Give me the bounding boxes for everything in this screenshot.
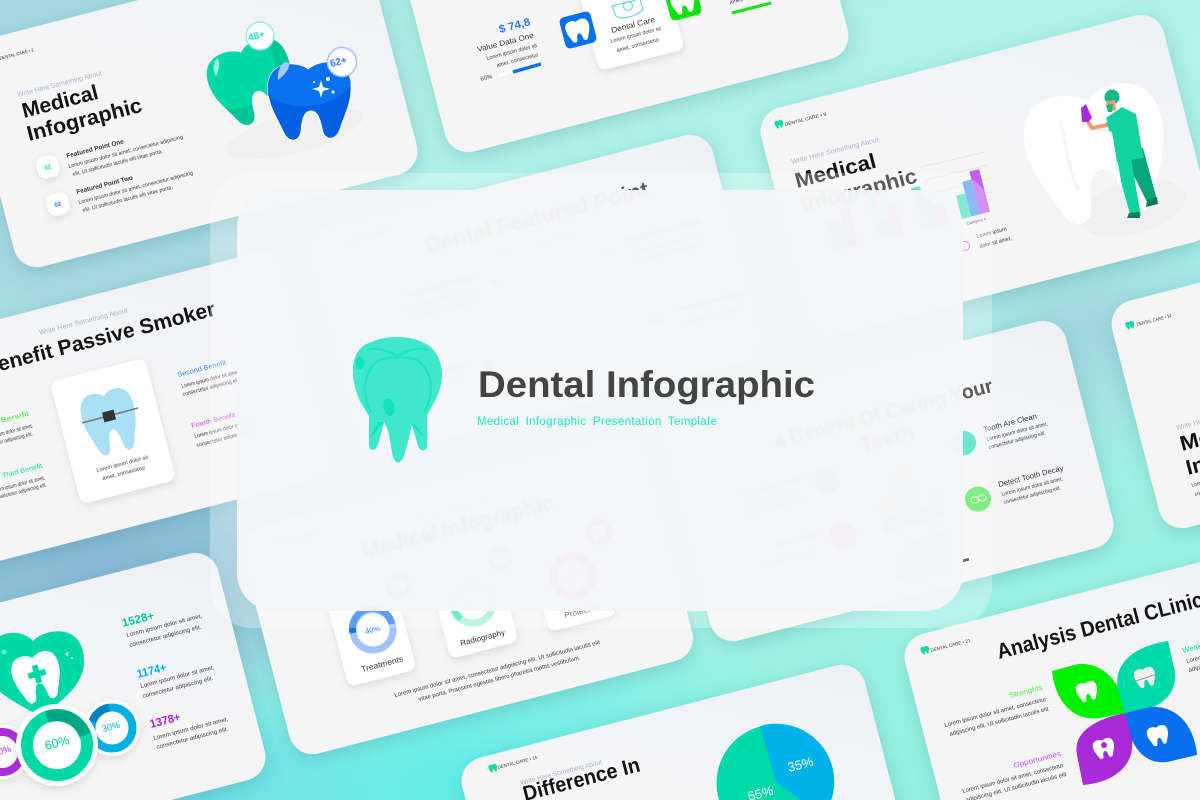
ghost text: featured points: Featured Point Three — [625, 216, 702, 244]
badge: 01: 01 — [44, 164, 53, 172]
paragraph: vitae porta. Praesent egestas libero pharetra mattis vestibulum. — [418, 655, 581, 703]
icon: small tooth and page label: DENTAL CARE • 9 — [784, 111, 827, 127]
ghost text: featured points: 04 — [652, 318, 660, 325]
panel: Medical Infographic teeth slide: DENTAL CARE • 2 — [0, 47, 35, 61]
text block: Tooth Are Clean: consectetur adipiscing elit. — [988, 430, 1047, 451]
text block: Fourth Benefit: Fourth Benefit — [191, 412, 236, 430]
ghost text: featured points: Lorem ipsum dolor sit amet, — [631, 232, 707, 257]
text block: Strenghts: Lorem ipsum dolor sit amet, consectetur — [944, 697, 1047, 729]
text block: Opportunities: Lorem ipsum dolor sit amet, consectetur — [962, 763, 1064, 795]
ghost text: Avoid Gum Disease and Whiter Tooth: Lorem ipsum dolor sit amet, — [760, 548, 820, 569]
ghost text: featured points: consectetur adipiscing elit. — [634, 241, 707, 265]
stat: 1174+: 1174+ — [136, 662, 168, 681]
panel: Benefit Passive Smoker slide — [0, 248, 335, 578]
stat: 1528+: consectetur adipiscing elit. — [129, 625, 202, 649]
text block — [1191, 468, 1200, 498]
card: Dental Care: amet, consectetur — [616, 37, 660, 54]
card: Dental Care: Dental Care — [610, 15, 657, 35]
ghost text: Avoid Gum Disease and Whiter Tooth: Avoid Gum Disease — [738, 474, 804, 499]
panel: Medical Infographic dentist slide: Write Here Something About — [791, 137, 880, 166]
text block: Second Benefit: Lorem ipsum dolor sit amet, — [181, 369, 241, 390]
panel: Medical Infographic rings slide: Write Here Something About — [414, 497, 493, 524]
donut: 60% teal — [16, 704, 98, 786]
text block: Second Benefit: consectetur adipiscing elit. — [182, 377, 242, 398]
bar chart — [822, 152, 993, 251]
ghost text: featured points: Featured Point Four — [678, 288, 748, 314]
text block: Detect Tooth Decay: consectetur adipiscing elit. — [1003, 485, 1062, 506]
ghost text: featured points: Lorem ipsum dolor sit amet, — [393, 375, 467, 400]
card: tooth with braces: amet, consectetur — [102, 465, 146, 482]
ghost text: featured points — [393, 216, 748, 400]
stat: value data one: Lorem ipsum dolor sit — [486, 43, 538, 62]
subtitle: Medical Infographic Presentation Template — [477, 416, 717, 428]
text block: Featured Point Two: elit. Ut sollicitudin iaculis elit vitae porta. — [82, 185, 174, 214]
card: Treatments: Treatments — [360, 654, 404, 674]
icon: teal blob — [950, 430, 976, 456]
ghost text: Avoid Gum Disease and Whiter Tooth — [738, 468, 856, 569]
icon: blue tooth tile — [559, 11, 597, 49]
icon: small tooth and page label — [488, 755, 538, 773]
card: Protection: Protection — [563, 602, 601, 620]
frosted outer glass panel — [210, 173, 992, 628]
text block: Detect Tooth Decay: Detect Tooth Decay — [997, 463, 1065, 489]
icon: small tooth and page label — [774, 111, 827, 129]
stat: value data one: 60% — [480, 74, 494, 83]
text block: Detect Tooth Decay — [997, 463, 1065, 506]
card: Dental Care: Lorem ipsum dolor sit — [610, 26, 662, 45]
paragraph: Lorem ipsum dolor sit amet, consectetur adipiscing elit. Ut sollicitudin iaculis elit — [394, 640, 601, 699]
ghost text: Avoid Gum Disease and Whiter Tooth: Whiter Tooth — [774, 529, 820, 549]
card: tooth with braces: Lorem ipsum dolor sit — [96, 455, 149, 474]
badge: 02 — [45, 191, 71, 217]
icon: small tooth and page label: DENTAL CARE • 21 — [930, 638, 971, 653]
icon: purple circle tooth — [586, 519, 612, 545]
panel: Dental Featured Point slide: DENTAL CARE • 5 — [346, 227, 392, 244]
panel: Difference In pie slide — [456, 660, 918, 800]
icon: small tooth and page label — [920, 638, 971, 655]
text block: Featured Point Two: Featured Point Two — [76, 175, 134, 196]
bar chart: Category 4 — [966, 216, 987, 226]
heading: Medical Infographic — [1177, 413, 1200, 480]
stat: 1528+: 1528+ — [121, 610, 156, 630]
text block: Strenghts: adipiscing elit. Ut sollicitudin iaculis elit — [949, 707, 1050, 738]
text block: Fourth Benefit: consectetur adipiscing elit. — [196, 428, 256, 449]
donut: 60% teal: 60% — [43, 733, 71, 753]
donut: 30% blue — [84, 700, 140, 756]
ghost text: featured points: consectetur adipiscing elit. — [407, 298, 479, 322]
card: tooth with braces — [50, 358, 176, 504]
icon: blue circle tooth — [386, 573, 412, 599]
text block: Second Benefit — [177, 360, 242, 398]
ghost text: Avoid Gum Disease and Whiter Tooth: consectetur adipiscing elit. — [746, 496, 806, 517]
panel: Medical Infographic teeth slide — [0, 0, 423, 272]
text block: Second Benefit: Second Benefit — [177, 360, 227, 379]
legend item: Lorem ipsum — [976, 226, 1008, 240]
text block: Tooth Are Clean: Tooth Are Clean — [982, 411, 1038, 434]
illustration: teal and blue teeth — [206, 21, 358, 141]
panel: Medical Infographic dentist slide — [755, 10, 1200, 340]
card: Radiography — [422, 529, 518, 659]
text block: Featured Point Two: Lorem ipsum dolor sit amet, consectetur adipiscing — [78, 171, 194, 206]
text block: Featured Point One: elit. Ut sollicitudin iaculis elit vitae porta. — [72, 149, 164, 178]
card: Treatments — [320, 557, 416, 687]
card: Radiography: 45% — [464, 596, 481, 609]
text block: Fourth Benefit — [191, 412, 256, 449]
card: Radiography: Radiography — [459, 628, 506, 648]
panel: Medical Infographic rings slide: DENTAL CARE • 7 — [275, 529, 321, 546]
stat: value data one: Value Data One — [476, 31, 535, 54]
icon: small tooth and page label — [1125, 313, 1173, 330]
text block: Strenghts — [944, 683, 1050, 738]
panel: Benefit Passive Smoker slide: Write Here Something About — [39, 307, 129, 337]
illustration: dentist cleaning giant tooth — [1016, 76, 1192, 247]
card: Treatments: 40% — [364, 623, 381, 636]
title: Dental Infographic: Dental Infographic — [478, 364, 815, 405]
panel: Value data and Dental Care slide — [392, 0, 854, 157]
stat: 1174+: consectetur adipiscing elit. — [142, 676, 215, 700]
icon: green blob — [965, 486, 991, 512]
panel: Medical Infographic rings slide — [237, 429, 698, 759]
text block: Tooth Are Clean — [982, 411, 1049, 451]
stat: value data one: amet, consectetur — [496, 52, 539, 69]
ghost text: featured points: Featured Point One — [396, 360, 466, 386]
text block: Tooth Are Clean: Lorem ipsum dolor sit amet, — [986, 421, 1049, 443]
pie chart: 35% — [786, 754, 815, 775]
progress bar: green — [729, 0, 773, 13]
illustration: patient in dental chair — [879, 465, 953, 578]
panel: 4 Benefit Of Caring Your Teeth slide — [657, 316, 1119, 646]
stat: 1528+ — [121, 610, 203, 649]
stat: 1378+: consectetur adipiscing elit. — [156, 727, 229, 751]
stat: 1378+ — [149, 711, 229, 751]
stat: 1378+: Lorem ipsum dolor sit amet, — [153, 717, 229, 742]
text block: First Benefit — [0, 411, 34, 451]
stat: 1528+: Lorem ipsum dolor sit amet, — [126, 614, 203, 639]
text block: Featured Point One: Lorem ipsum dolor sit amet, consectetur adipiscing — [68, 135, 184, 170]
panel: Dental Featured Point slide — [304, 130, 766, 460]
panel: Medical Infographic teeth slide: Write Here Something About — [17, 70, 103, 99]
text block: Opportunities: Opportunities — [1012, 749, 1062, 770]
heading: Dental Featured Point: Dental Featured Point — [422, 178, 651, 258]
card: Protection — [521, 502, 617, 632]
ghost text: featured points: Lorem ipsum dolor sit amet, — [683, 306, 743, 327]
badge: 01 — [35, 154, 61, 180]
icon: heart with tooth — [0, 631, 84, 716]
text block: Strenghts: Strenghts — [1008, 683, 1044, 700]
text block: Fourth Benefit: Lorem ipsum dolor sit amet, — [194, 419, 254, 440]
heading: Medical Infographic: Medical Infographic — [359, 491, 556, 563]
icon: small tooth and page label: DENTAL CARE • 14 — [1136, 313, 1173, 327]
pie chart — [716, 724, 834, 800]
ghost text: featured points: Lorem ipsum dolor sit amet, — [404, 287, 478, 312]
donut: 30% blue: 30% — [101, 720, 121, 734]
panel: stats slide with donut rings — [0, 548, 271, 800]
legend item: dolor sit amet, — [979, 236, 1013, 250]
icon: teal tooth logo — [353, 337, 442, 462]
legend item — [960, 226, 1013, 250]
text block: Third Benefit — [0, 463, 48, 502]
stat: value data one — [476, 16, 541, 83]
heading: Medical Infographic: Infographic — [24, 94, 145, 146]
donut: 40% purple — [0, 725, 29, 779]
card: Dental Care — [569, 0, 685, 71]
panel: 4 Benefit Of Caring Your Teeth slide: DENTAL CARE • 11 — [751, 386, 797, 403]
panel: Difference In pie slide: Write Here Something About — [520, 759, 603, 787]
ghost text: featured points: 03 — [601, 250, 609, 257]
icon: small tooth and page label: DENTAL CARE • 15 — [497, 755, 538, 770]
text block: Opportunities — [962, 749, 1068, 800]
text block: Weakness — [1181, 633, 1200, 674]
text block: Detect Tooth Decay: Lorem ipsum dolor sit amet, — [1001, 476, 1064, 498]
heading: Medical Infographic: Medical — [792, 150, 879, 193]
heading: Medical Infographic: Infographic — [798, 165, 920, 217]
heading: 4 Benefit Of Caring Your Teeth: Teeth — [858, 422, 917, 457]
illustration: teal and blue teeth: 62+ — [329, 55, 348, 70]
text block: Third Benefit: Third Benefit — [2, 463, 43, 480]
panel: Analysis Dental Clinic slide — [899, 536, 1200, 800]
panel: Dental Featured Point slide: Write Here Something About — [497, 230, 581, 258]
badge: 02: 02 — [54, 201, 63, 209]
heading: Medical Infographic: Medical — [19, 81, 101, 123]
heading: Medical Infographic — [792, 150, 920, 217]
illustration: teal and blue teeth: 48+ — [247, 29, 266, 44]
ghost text: featured points: Featured Point Two — [405, 273, 476, 299]
icon: green tooth tile — [664, 0, 702, 21]
ghost text: featured points: 02 — [491, 280, 499, 287]
text block: Featured Point One: Featured Point One — [66, 138, 125, 160]
panel: far right slide — [1106, 203, 1200, 533]
card: Protection: 87% — [564, 569, 581, 582]
stat: 1378+: 1378+ — [149, 711, 182, 731]
stat: value data one: $ 74,8 — [498, 16, 532, 36]
stat: 1174+ — [136, 662, 215, 700]
diagram: four petal SWOT — [1052, 641, 1197, 785]
decorative dark dash — [962, 558, 969, 562]
heading: 4 Benefit Of Caring Your Teeth: 4 Benefit Of Caring Your — [772, 375, 995, 453]
ghost text: Avoid Gum Disease and Whiter Tooth: Lorem ipsum dolor sit amet, — [744, 488, 804, 509]
icon: green circle tooth — [488, 546, 512, 572]
stat: 1174+: Lorem ipsum dolor sit amet, — [140, 665, 215, 690]
frosted inner title panel — [237, 190, 963, 611]
